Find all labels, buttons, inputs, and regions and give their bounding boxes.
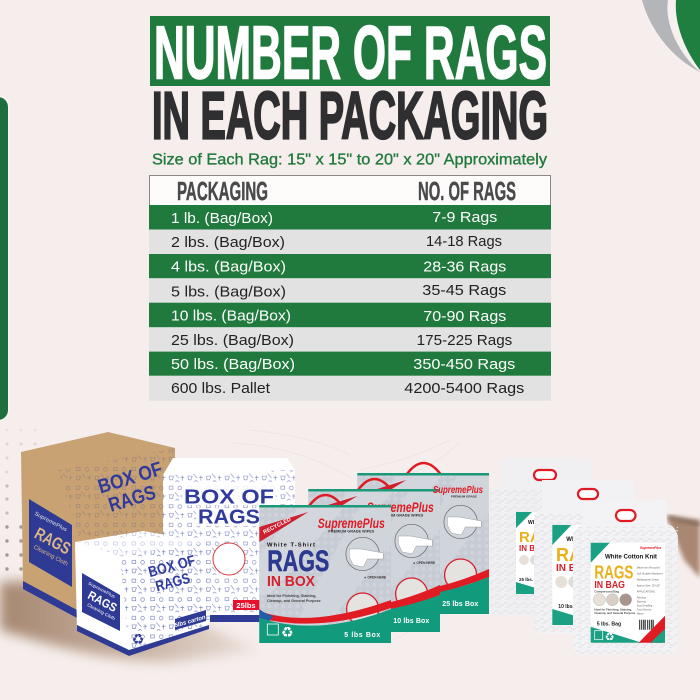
packaging column: 50 lbs. (Bag/Box)	[171, 356, 295, 373]
front rags box 5 lbs: ♻	[281, 625, 294, 641]
barcode	[640, 620, 653, 630]
front bag label: Staining	[637, 601, 646, 604]
number of rags column	[404, 209, 524, 397]
photo circle	[347, 593, 379, 625]
back box brand	[433, 484, 483, 498]
dot grid	[5, 428, 37, 571]
front bag label	[591, 543, 665, 644]
title band	[150, 16, 550, 86]
table	[149, 176, 551, 401]
white 25 lbs box: 25lbs	[236, 601, 256, 610]
packaging column: 25 lbs. (Bag/Box)	[171, 332, 294, 349]
middle bag 10 lbs	[534, 480, 640, 634]
front rags box 5 lbs: ◄ OPEN HERE	[363, 576, 386, 580]
title	[150, 10, 550, 154]
white 5 lbs box: RAGS	[85, 588, 119, 615]
5 lbs panel	[82, 573, 120, 631]
packaging column: 1 lb. (Bag/Box)	[171, 210, 273, 227]
25 lbs box label: RAGS	[198, 506, 260, 528]
front bag 5 lbs	[573, 500, 678, 655]
back bag label	[516, 512, 562, 594]
middle bag label: RAGS	[556, 545, 608, 565]
packaging column	[171, 210, 295, 397]
kraft box: Cleaning Cloth	[32, 545, 69, 568]
25 lbs box label	[182, 485, 276, 528]
back bag label: 25 lbs.	[519, 577, 533, 582]
table header: PACKAGING	[177, 178, 268, 206]
front rags box 5 lbs: IN BOX	[267, 573, 315, 590]
front bag label: 5 lbs. Bag	[597, 622, 621, 628]
middle rags box 10 lbs: SupremePlus	[367, 500, 434, 515]
white 5 lbs box: RAGS	[154, 570, 192, 595]
front rags box 5 lbs: Ideal for Finishing, Staining,	[267, 594, 316, 598]
front bag label: RAGS	[594, 563, 633, 583]
wood surface	[0, 516, 700, 662]
decorative curved lines	[233, 430, 460, 640]
25 lbs tag	[233, 600, 260, 610]
front rags box 5 lbs: 5 lbs Box	[344, 632, 380, 639]
packaging column: 2 lbs. (Bag/Box)	[171, 234, 285, 251]
front rags box 5 lbs: PREMIUM GRADE WIPES	[328, 530, 375, 534]
back bag label: IN BAG	[519, 544, 547, 553]
recycled ribbon	[259, 512, 308, 542]
front bag label: SupremePlus	[640, 546, 661, 550]
front bag label: Auto Detailing	[637, 605, 653, 608]
front bag label: Soft Durable Absorbent	[637, 573, 663, 576]
front rags box 5 lbs	[259, 495, 391, 643]
icon: hand	[346, 537, 379, 571]
front bag label: Compressed Bag	[594, 590, 619, 594]
middle bag label	[552, 525, 608, 625]
number of rags column: 175-225 Rags	[417, 332, 512, 349]
kraft box: SupremePlus	[33, 511, 68, 533]
front bag label: Ideal for Finishing, Staining,	[594, 608, 632, 612]
front rags box 5 lbs: RECYCLED	[262, 517, 292, 536]
packaging column: 5 lbs. (Bag/Box)	[171, 284, 286, 300]
front rags box 5 lbs: RAGS	[267, 545, 329, 578]
front bag label: White Cotton Knit	[605, 553, 657, 560]
number of rags column: 70-90 Rags	[423, 308, 506, 325]
back bag label: White	[528, 520, 542, 526]
number of rags column: 350-450 Rags	[413, 356, 515, 373]
middle bag label: 10 lbs.	[558, 604, 574, 610]
front bag label: APPLICATIONS:	[637, 591, 656, 594]
kraft box label: BOX OF	[95, 458, 165, 498]
subtitle: Size of Each Rag: 15" x 15" to 20" x 20" Approximately	[152, 152, 547, 168]
white 25 lbs box	[163, 458, 295, 622]
table header	[150, 176, 550, 206]
back rags box 25 lbs	[357, 463, 489, 614]
front bag label: ♻	[605, 631, 615, 644]
25 lbs box label: BOX OF	[184, 486, 274, 508]
handle	[534, 470, 556, 480]
handle	[578, 489, 598, 499]
brand: SupremePlus	[318, 516, 385, 531]
packaging column: 10 lbs. (Bag/Box)	[171, 308, 291, 324]
front bag label: Wipes	[637, 613, 644, 616]
handle	[616, 510, 636, 521]
number of rags column: 4200-5400 Rags	[404, 380, 524, 397]
kraft box: RAGS	[106, 482, 158, 517]
front bag label: Multipurpose Cotton	[637, 579, 660, 582]
front bag label: Food Service	[637, 609, 652, 612]
white 5 lbs box	[75, 531, 209, 656]
front bag label: Approx Size: 15"x15"	[637, 585, 660, 588]
packaging column: 600 lbs. Pallet	[171, 380, 271, 397]
middle rags box 10 lbs: PREMIUM GRADE WIPES	[377, 514, 424, 518]
middle bag label: IN BAG	[556, 563, 591, 574]
top right leaf shapes	[642, 0, 700, 72]
front bag label: Painting	[637, 597, 646, 600]
swoosh	[259, 600, 391, 624]
number of rags column: 35-45 Rags	[422, 282, 506, 299]
kraft box: RAGS	[31, 524, 74, 558]
back box brand: PREMIUM GRADE	[451, 494, 477, 498]
middle rags box 10 lbs	[308, 479, 440, 632]
number of rags column: 14-18 Rags	[426, 233, 502, 250]
white 5 lbs box: 5lbs carton	[174, 615, 207, 629]
front rags box 5 lbs: Cleanup, and General Purpose	[267, 599, 321, 603]
number of rags column: 7-9 Rags	[432, 209, 497, 226]
front bag label: IN BAG	[594, 580, 625, 591]
row stripes	[149, 205, 551, 401]
kraft panel	[29, 499, 72, 587]
5 lbs carton tag	[175, 610, 206, 630]
middle rags box 10 lbs: ◄ OPEN HERE	[412, 561, 435, 565]
middle bag label: White	[566, 537, 583, 543]
middle rags box 10 lbs: 10 lbs Box	[393, 618, 429, 625]
white 5 lbs box: SupremePlus	[87, 580, 116, 599]
number of rags column: 28-36 Rags	[423, 258, 506, 276]
back box brand: SupremePlus	[433, 484, 483, 496]
back bag label: RAGS	[519, 529, 562, 546]
kraft box	[21, 432, 175, 620]
back bag 25 lbs	[490, 458, 598, 615]
icon: recycle: ♻	[132, 632, 144, 648]
recycle icons	[267, 624, 278, 635]
back rags box 25 lbs: 25 lbs Box	[442, 601, 478, 608]
product name: White T-Shirt	[267, 542, 315, 548]
5 lbs box label: BOX OF	[146, 552, 197, 581]
left green panel	[0, 96, 10, 421]
front bag label: Cleanup, and General Purpose	[594, 611, 636, 615]
front bag label: Made from Recycled	[637, 567, 660, 570]
white 5 lbs box: Cleaning Cloth	[86, 602, 117, 621]
packaging column: 4 lbs. (Bag/Box)	[171, 258, 286, 276]
table header: NO. OF RAGS	[418, 178, 516, 206]
